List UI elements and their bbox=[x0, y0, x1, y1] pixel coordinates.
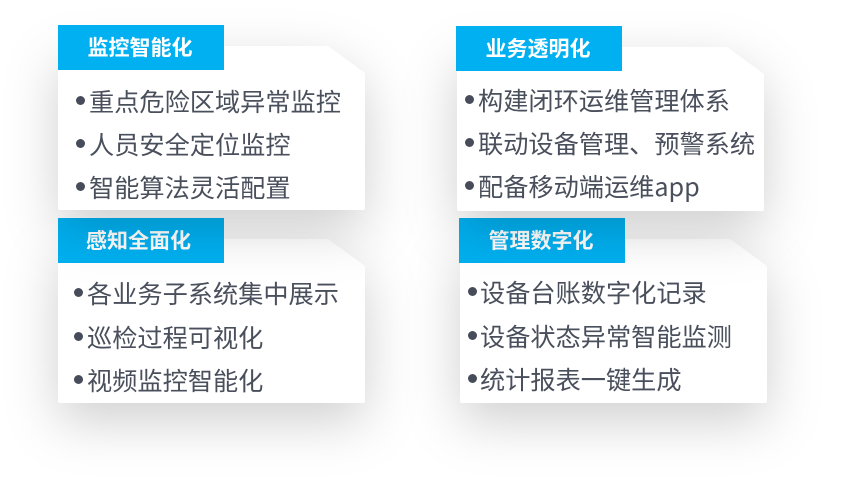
list item: 设备台账数字化记录: 设备台账数字化记录 bbox=[480, 274, 707, 310]
list item: 各业务子系统集中展示: 各业务子系统集中展示 bbox=[87, 275, 339, 311]
list item: 设备状态异常智能监测: 设备状态异常智能监测 bbox=[480, 318, 732, 354]
list item: 重点危险区域异常监控: 重点危险区域异常监控 bbox=[89, 83, 341, 119]
list item: 构建闭环运维管理体系: 构建闭环运维管理体系 bbox=[478, 82, 730, 118]
list item: 巡检过程可视化: 巡检过程可视化 bbox=[87, 319, 263, 355]
heading: 感知全面化 bbox=[58, 218, 224, 263]
list item: 统计报表一键生成: 统计报表一键生成 bbox=[480, 361, 682, 397]
panel: 感知全面化 bbox=[34, 218, 388, 444]
list item: 智能算法灵活配置: 智能算法灵活配置 bbox=[89, 169, 290, 205]
heading: 感知全面化: 感知全面化 bbox=[86, 225, 191, 255]
panel: 管理数字化 bbox=[436, 218, 790, 444]
list item: 视频监控智能化: 视频监控智能化 bbox=[87, 362, 263, 398]
heading: 管理数字化: 管理数字化 bbox=[488, 225, 594, 255]
list item: 人员安全定位监控: 人员安全定位监控 bbox=[89, 126, 290, 162]
card body bbox=[436, 234, 790, 444]
heading: 管理数字化 bbox=[459, 218, 625, 263]
infographic canvas bbox=[34, 25, 790, 444]
heading: 监控智能化: 监控智能化 bbox=[88, 32, 192, 62]
card body bbox=[434, 42, 788, 252]
card body bbox=[34, 40, 388, 252]
panel: 监控智能化 bbox=[34, 25, 388, 252]
card body bbox=[34, 234, 388, 444]
heading: 业务透明化: 业务透明化 bbox=[486, 33, 590, 63]
heading: 监控智能化 bbox=[58, 25, 224, 70]
heading: 业务透明化 bbox=[456, 26, 622, 71]
list item: 配备移动端运维app: 配备移动端运维app bbox=[478, 168, 700, 204]
panel: 业务透明化 bbox=[434, 26, 788, 252]
list item: 联动设备管理、预警系统: 联动设备管理、预警系统 bbox=[478, 125, 755, 161]
